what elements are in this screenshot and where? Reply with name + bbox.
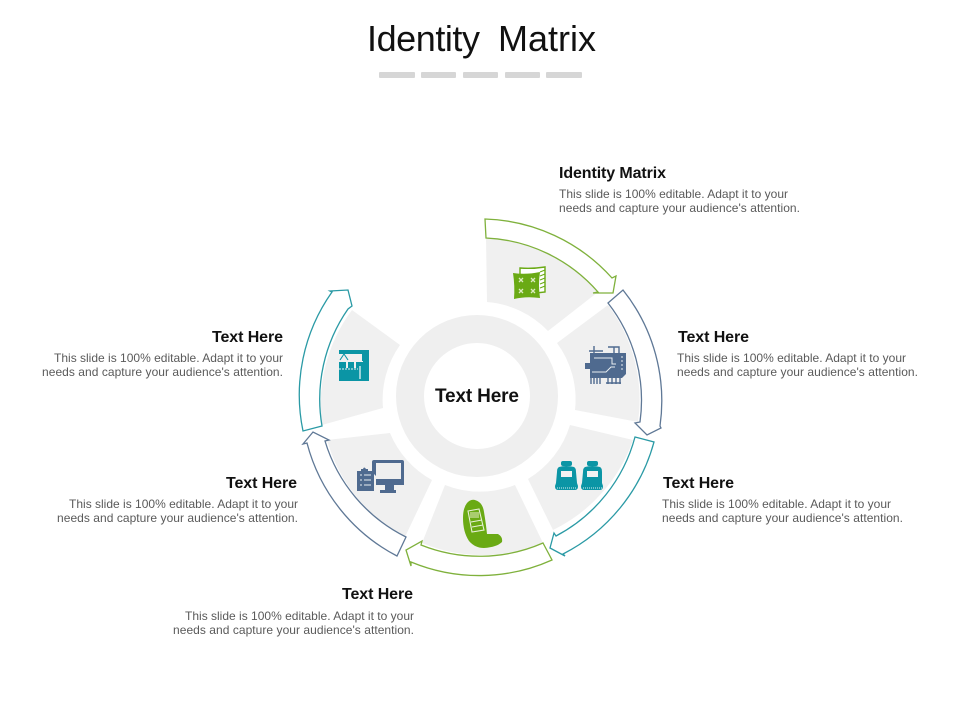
text block: right upper: Text Here [678,329,749,346]
arrow 5 [303,432,406,556]
title underline dashes [379,72,582,78]
text block: right lower: This slide is 100% editable. Adapt it to your [662,497,891,511]
arrow 2 [608,290,662,435]
icon: factory [339,350,369,381]
icon: car seat [463,500,502,548]
icon: seats [555,461,603,490]
text block: identity matrix: needs and capture your audience's attention. [559,201,800,215]
text block: right upper: This slide is 100% editable. Adapt it to your [677,351,906,365]
text block: identity matrix: This slide is 100% editable. Adapt it to your [559,187,788,201]
icon: circuit board [585,346,626,384]
text block: right lower: Text Here [663,475,734,492]
arrow 4 [406,541,552,576]
text block: left lower: Text Here [226,475,297,492]
title: Identity [367,18,480,59]
center label: Text Here [435,386,519,407]
text block: left lower [57,475,298,525]
icon: monitor and clipboard [357,460,404,493]
text block: right upper: needs and capture your audience's attention. [677,365,918,379]
icon: pillow [513,267,545,299]
text block: bottom [173,586,414,637]
text block: identity matrix: Identity Matrix [559,165,666,182]
panel: grey sectors [321,238,640,555]
text block: right lower [662,475,903,525]
arrow 3 [550,437,654,556]
text block: left upper: Text Here [212,329,283,346]
text block: right lower: needs and capture your audience's attention. [662,511,903,525]
text block: identity matrix [559,165,800,215]
arrow 6 [299,290,352,431]
text block: bottom: Text Here [342,586,413,603]
text block: bottom: This slide is 100% editable. Adapt it to your [185,609,414,623]
text block: left upper [42,329,283,379]
text block: bottom: needs and capture your audience's attention. [173,623,414,637]
central ring [410,329,544,463]
text block: right upper [677,329,918,379]
arrow 1 [485,219,616,293]
title: Matrix [498,18,596,59]
text block: left lower: needs and capture your audience's attention. [57,511,298,525]
text block: left lower: This slide is 100% editable. Adapt it to your [69,497,298,511]
text block: left upper: needs and capture your audience's attention. [42,365,283,379]
text block: left upper: This slide is 100% editable. Adapt it to your [54,351,283,365]
